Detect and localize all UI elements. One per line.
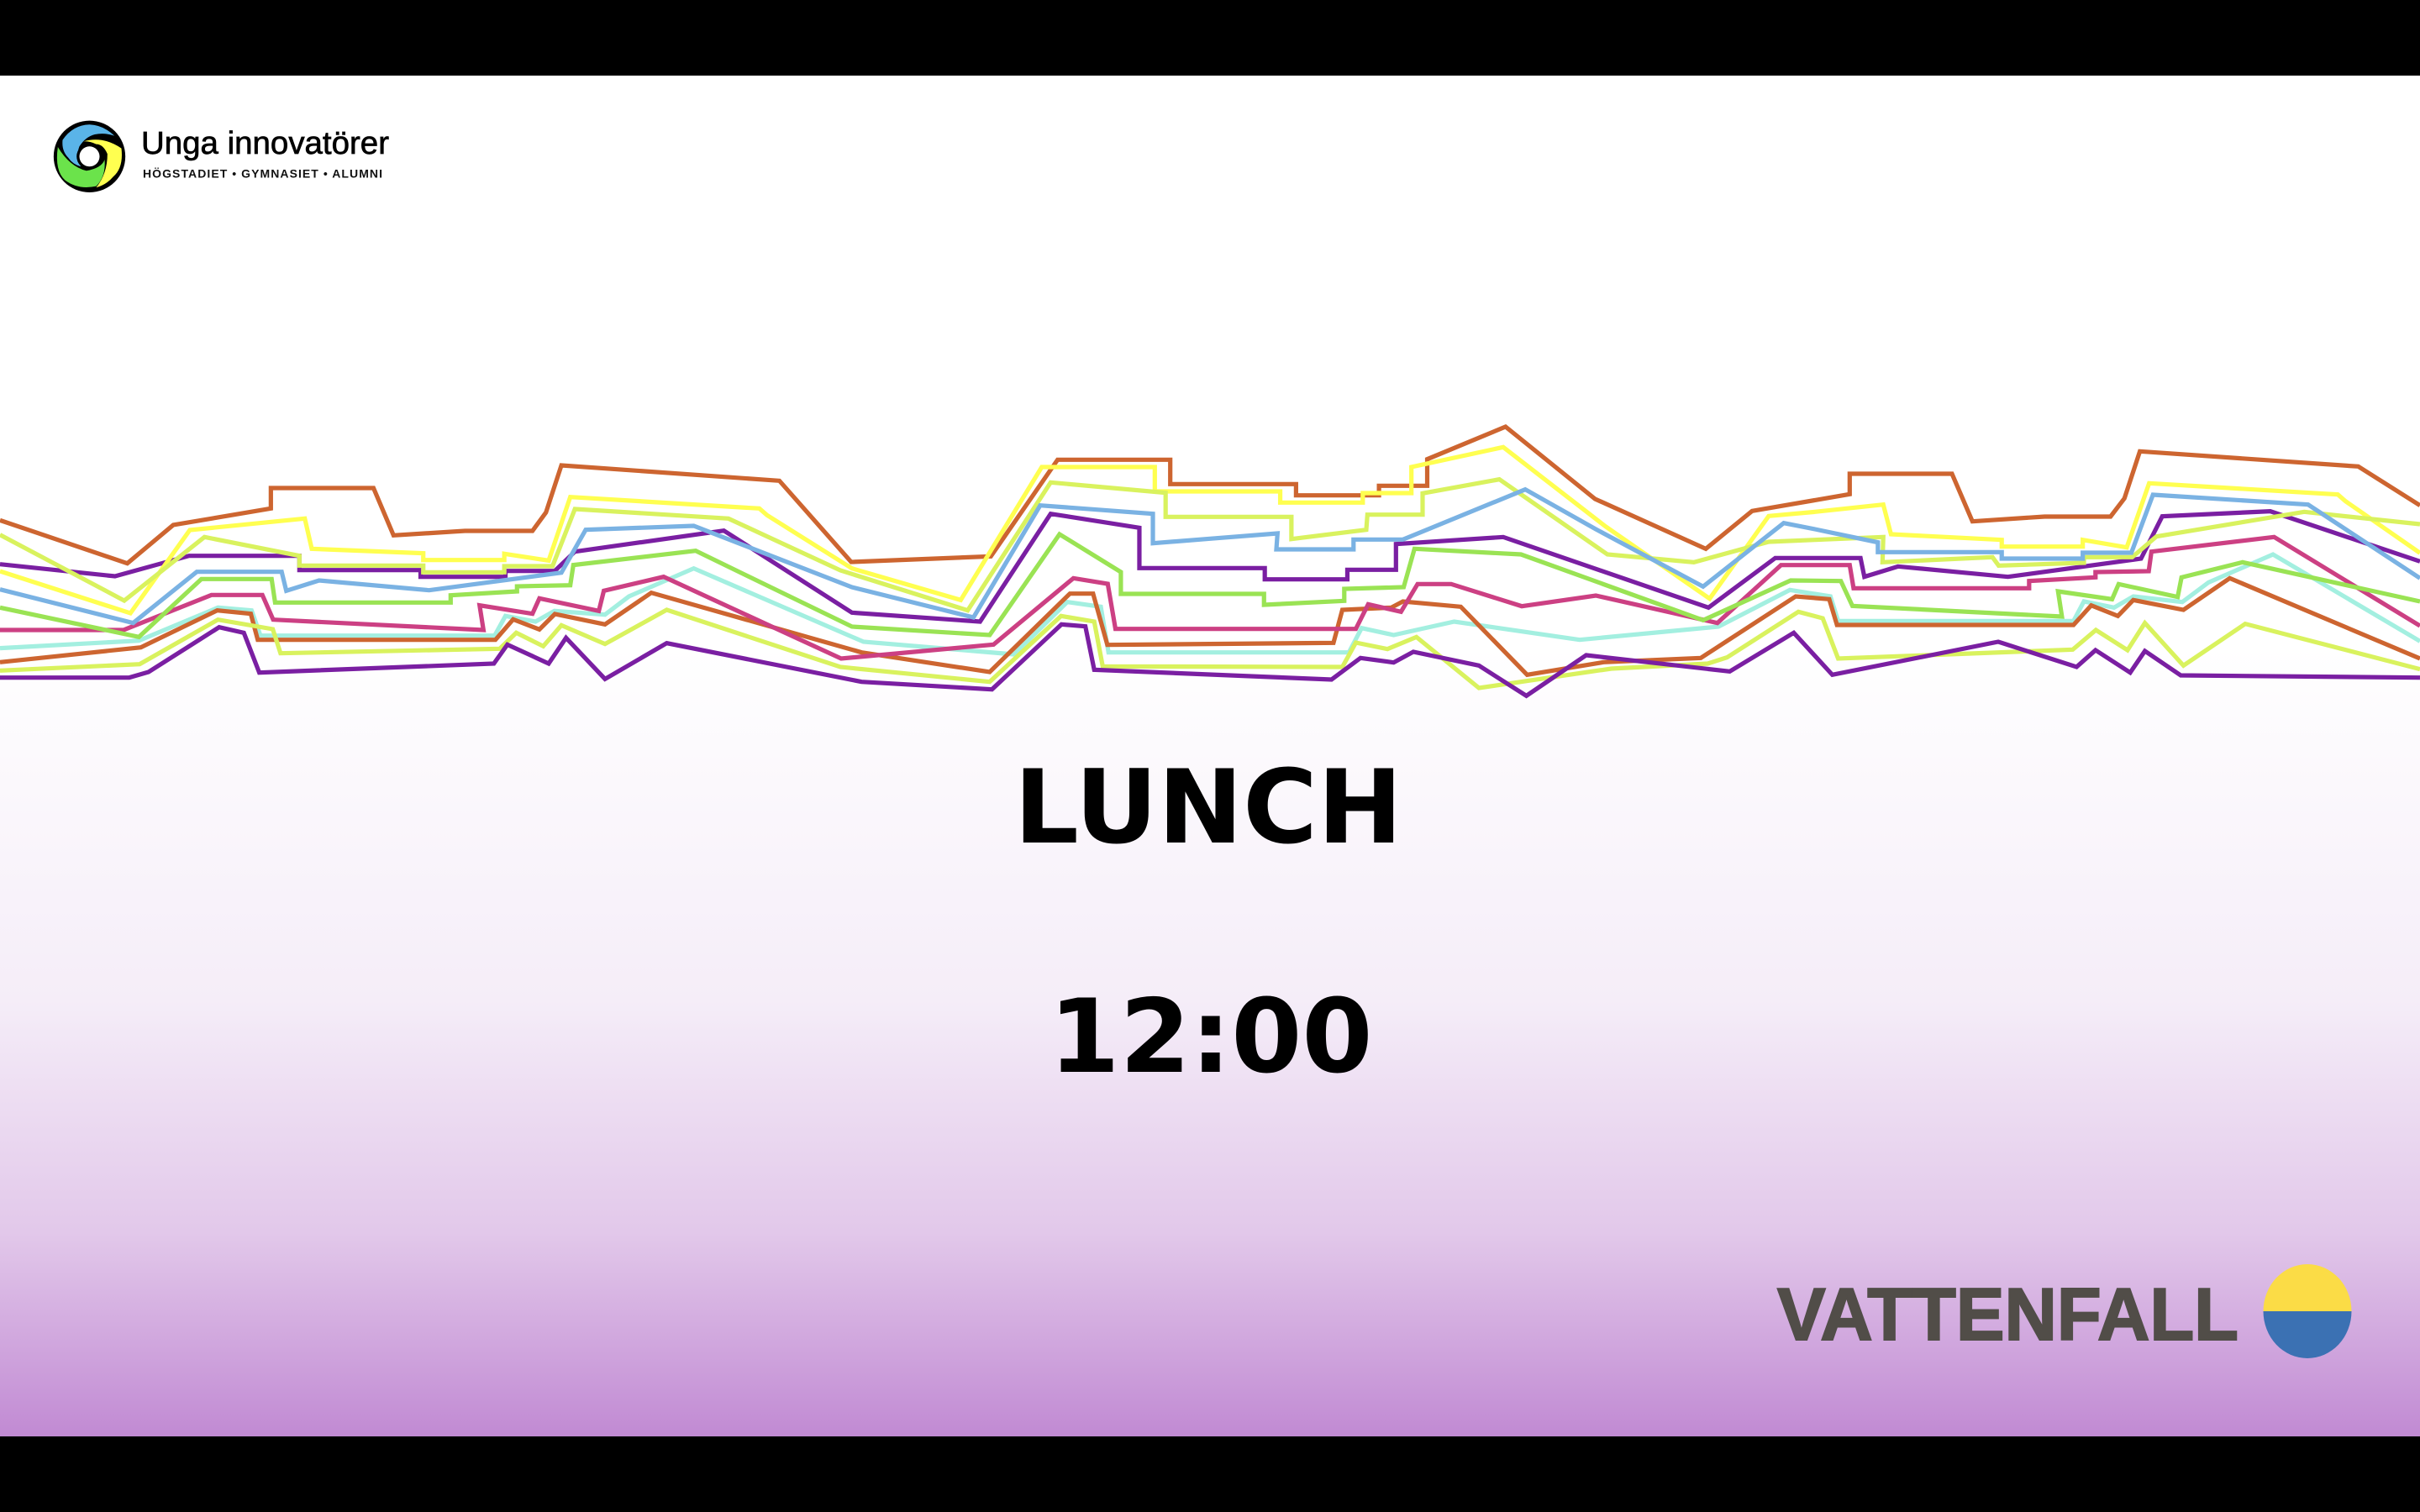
line chart: twelve stacked wave lines: [0, 427, 2420, 696]
line: orange upper: [0, 427, 2420, 564]
line: yellow: [0, 447, 2420, 613]
logo: Vattenfall: [1777, 1264, 2351, 1358]
bottom black bar: [0, 1436, 2420, 1512]
logo tagline: HÖGSTADIET • GYMNASIET • ALUMNI: [143, 166, 382, 180]
heading: LUNCH: LUNCH: [1014, 748, 1402, 867]
Vattenfall wordmark: VATTENFALL: [1777, 1273, 2238, 1356]
line: orange lower: [0, 578, 2420, 675]
heading: time 12:00: 12:00: [1049, 978, 1373, 1096]
line: aqua: [0, 554, 2420, 654]
icon: Vattenfall half-sun emblem: [2264, 1264, 2351, 1358]
line: purple lower: [0, 624, 2420, 696]
icon: swirl emblem: [54, 121, 125, 192]
line: lime lower: [0, 610, 2420, 688]
logo wordmark: Unga innovatörer: [141, 126, 389, 161]
line: pink: [0, 537, 2420, 659]
top black bar: [0, 0, 2420, 76]
line: blue: [0, 490, 2420, 623]
logo: Unga innovatörer: [54, 121, 389, 192]
line: purple upper: [0, 512, 2420, 622]
line: green: [0, 534, 2420, 637]
line: lime upper: [0, 480, 2420, 611]
